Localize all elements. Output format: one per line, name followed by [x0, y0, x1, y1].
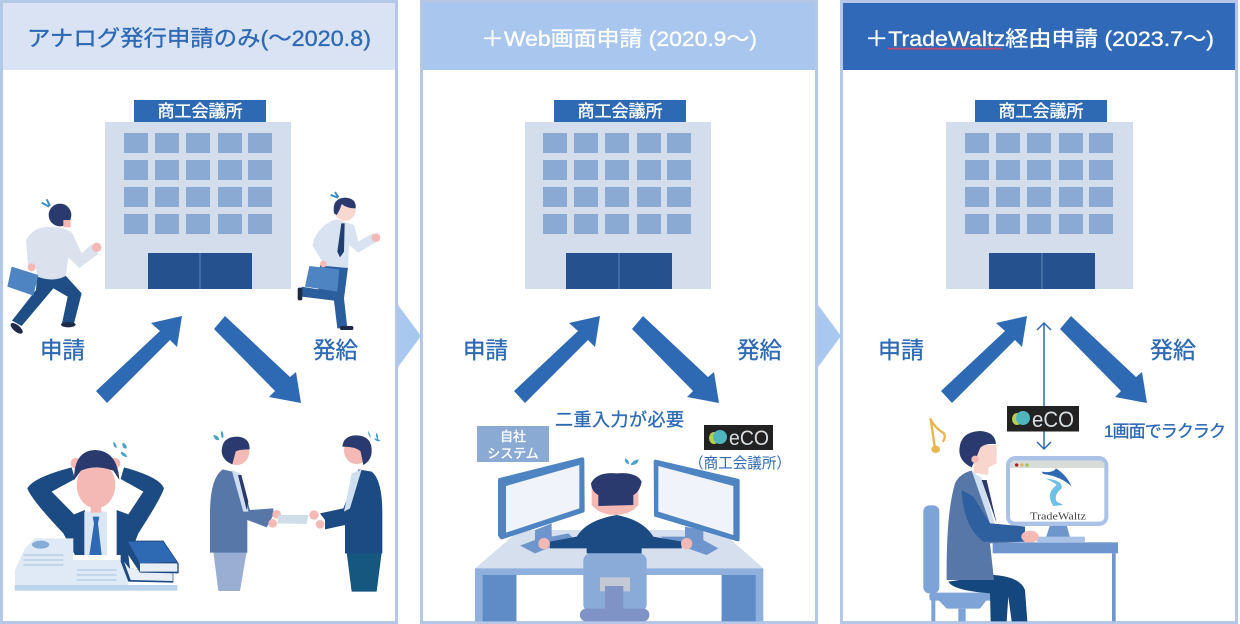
arrow: issuance — [632, 316, 719, 403]
label: application: 申請 — [878, 337, 924, 363]
building: chamber of commerce — [525, 100, 711, 289]
icon: right monitor — [656, 462, 738, 555]
icon: left monitor — [500, 459, 583, 553]
illustration: man at TradeWaltz monitor — [923, 418, 1118, 621]
heading: analog — [3, 3, 395, 70]
heading: TradeWaltz: ＋TradeWaltz経由申請 (2023.7～) — [865, 28, 1214, 51]
illustrations: analog workflow — [7, 192, 382, 592]
icon: chair — [580, 553, 649, 621]
panel: web screen application — [422, 2, 816, 622]
illustration: man at two monitors — [475, 458, 763, 621]
icon: man from behind — [538, 458, 692, 553]
box: in-house system: 自社 — [500, 429, 526, 444]
icon: desk — [993, 542, 1118, 621]
icon: chair — [923, 505, 1003, 621]
box: in-house system: システム — [487, 446, 539, 461]
arrow: application — [514, 316, 600, 403]
icon: seated man — [947, 431, 1039, 621]
icon: music note — [930, 418, 945, 448]
panel: analog applications only — [2, 2, 396, 622]
icon: running man with tie — [298, 192, 380, 330]
heading: analog: アナログ発行申請のみ(～2020.8) — [27, 26, 371, 51]
logo: eCO: eCO — [729, 427, 769, 450]
callout: one screen easy: 1画面でラクラク — [1104, 422, 1226, 441]
building: chamber of commerce: 商工会議所 — [578, 102, 662, 121]
icon: two men exchanging a document — [210, 431, 382, 592]
building: chamber of commerce — [946, 100, 1133, 289]
box: in-house system — [477, 426, 549, 462]
arrow: application — [96, 316, 182, 403]
arrow: application — [941, 316, 1027, 403]
icon: monitor with TradeWaltz logo: TradeWaltz — [1030, 511, 1087, 522]
label: application: 申請 — [40, 337, 85, 363]
heading: web — [423, 3, 815, 70]
icon: note head — [931, 446, 940, 453]
label: application: 申請 — [463, 337, 508, 363]
label: issuance: 発給 — [313, 337, 358, 363]
label: chamber of commerce: （商工会議所） — [689, 454, 791, 472]
building: chamber of commerce: 商工会議所 — [158, 102, 242, 121]
icon: monitor with TradeWaltz logo — [1006, 456, 1108, 542]
heading: web: ＋Web画面申請 (2020.9～) — [481, 28, 757, 51]
logo: eCO: eCO — [1032, 407, 1074, 432]
panel: TradeWaltz application — [842, 2, 1236, 622]
arrow: step one to two — [398, 305, 421, 367]
building: chamber of commerce — [105, 100, 291, 289]
label: issuance: 発給 — [737, 337, 782, 363]
arrow: two-way link to eCO — [1037, 323, 1051, 449]
arrow: issuance — [1060, 316, 1147, 403]
logo: eCO — [704, 425, 773, 450]
logo: eCO — [1007, 406, 1079, 432]
heading: TradeWaltz — [843, 3, 1235, 70]
label: issuance: 発給 — [1150, 337, 1196, 363]
icon: running man with briefcase — [7, 199, 101, 336]
arrow: step two to three — [818, 305, 841, 367]
icon: stressed man at desk — [15, 442, 179, 591]
building: chamber of commerce: 商工会議所 — [998, 102, 1084, 121]
arrow: issuance — [214, 316, 301, 403]
callout: double entry needed: 二重入力が必要 — [555, 410, 684, 430]
